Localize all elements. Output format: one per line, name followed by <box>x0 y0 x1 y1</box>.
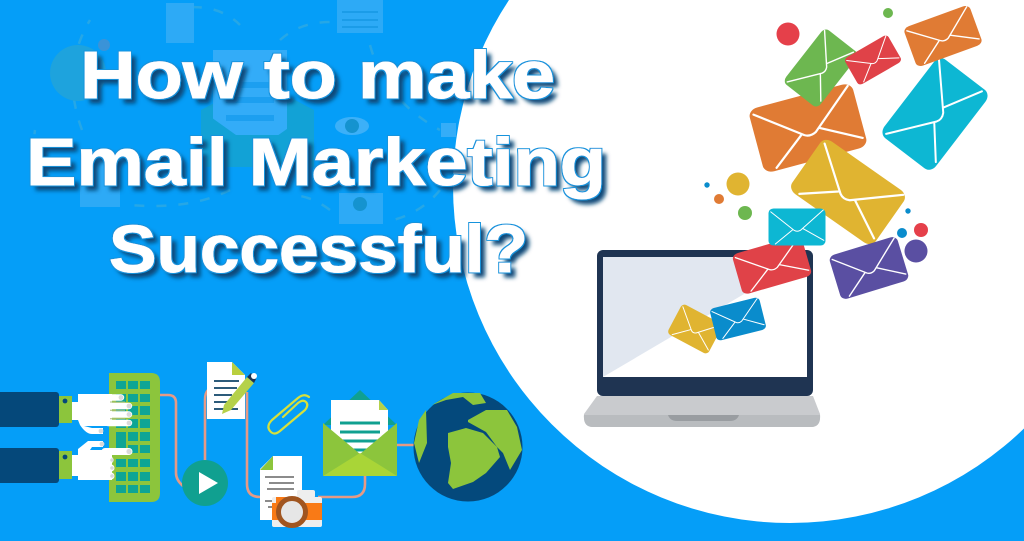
envelope: top orange <box>903 4 983 68</box>
icon: open envelope <box>323 390 397 476</box>
title: How to make <box>80 38 555 113</box>
envelope: small cyan <box>768 208 826 246</box>
lower arm and hand <box>0 441 132 483</box>
title <box>26 38 606 287</box>
envelope: large cyan <box>879 55 991 173</box>
envelope: yellow in laptop <box>667 303 723 355</box>
envelope: large orange <box>748 82 868 174</box>
coloured dots <box>704 8 928 262</box>
connector lines <box>160 390 416 497</box>
envelope: small red <box>844 34 902 86</box>
envelope: blue in laptop <box>709 297 767 341</box>
laptop <box>584 250 820 427</box>
title: Email Marketing <box>26 125 606 200</box>
envelope: mid red <box>732 235 812 295</box>
envelope: purple <box>828 236 910 300</box>
icon: play button <box>182 460 228 506</box>
icon: document with camera <box>260 456 322 527</box>
envelope: large yellow <box>788 137 908 247</box>
white circle <box>453 0 1024 523</box>
upper arm and hand <box>0 392 131 434</box>
icon: document with pencil <box>207 362 257 419</box>
envelope: green <box>782 27 860 109</box>
keyboard <box>109 373 160 502</box>
faded background icons <box>34 0 456 224</box>
title: Successful? <box>109 212 528 287</box>
icon: paperclip <box>268 395 309 434</box>
icon: globe <box>414 392 522 502</box>
